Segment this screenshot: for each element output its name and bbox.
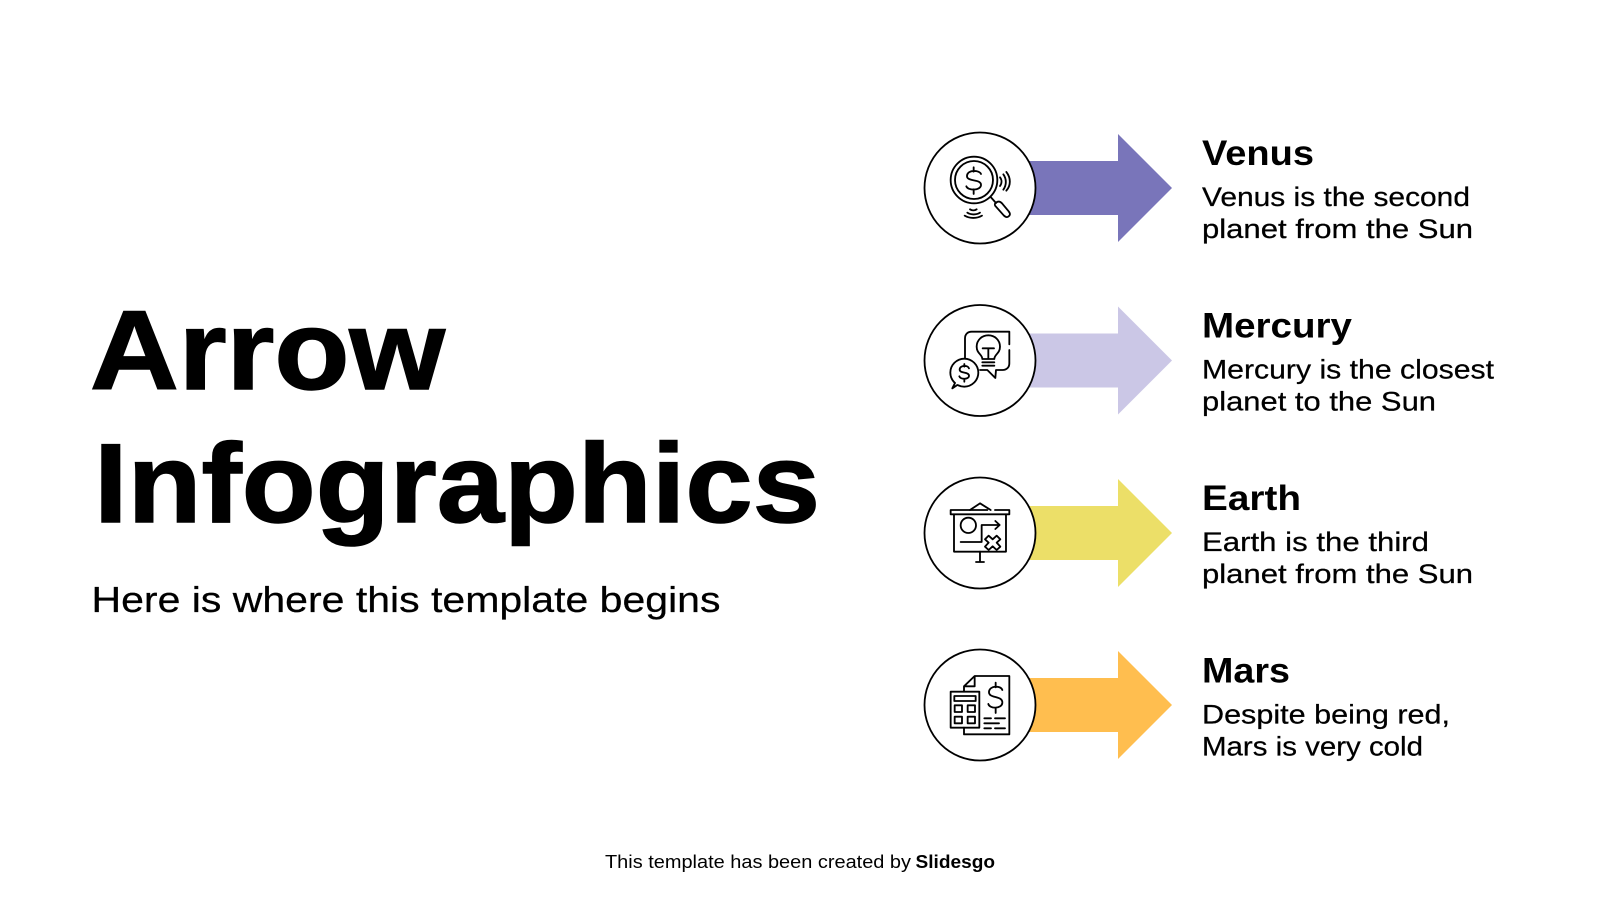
icon circle: Earth bbox=[924, 478, 1036, 588]
arrow: Mars bbox=[1025, 651, 1172, 759]
heading: Earth: Earth bbox=[1202, 479, 1301, 518]
description: Earth bbox=[1202, 527, 1473, 589]
heading: Mars: Mars bbox=[1202, 652, 1290, 690]
item: Mercury bbox=[924, 305, 1495, 416]
arrow: Venus bbox=[1025, 134, 1172, 242]
description: Mercury: planet to the Sun bbox=[1202, 386, 1436, 416]
description: Mars: Mars is very cold bbox=[1202, 732, 1423, 762]
footer credit: Slidesgo bbox=[916, 852, 995, 872]
description: Mars bbox=[1202, 700, 1450, 762]
icon: magnifier with dollar bbox=[951, 157, 1010, 218]
description: Earth: Earth is the third bbox=[1202, 527, 1429, 557]
item: Earth bbox=[924, 478, 1473, 589]
icon circle: Mercury bbox=[924, 305, 1036, 416]
description: Venus bbox=[1202, 182, 1473, 244]
footer credit: This template has been created by bbox=[605, 852, 911, 872]
icon: presentation board bbox=[951, 503, 1009, 562]
heading: Venus: Venus bbox=[1202, 134, 1314, 173]
heading: Mercury: Mercury bbox=[1202, 306, 1353, 346]
description: Mercury bbox=[1202, 354, 1495, 416]
title bbox=[90, 288, 820, 546]
icon circle: Mars bbox=[924, 650, 1036, 760]
title: Infographics bbox=[94, 421, 820, 546]
description: Venus: Venus is the second bbox=[1202, 182, 1470, 212]
title: Arrow bbox=[90, 288, 446, 413]
icon circle: Venus bbox=[924, 132, 1036, 244]
description: Mercury: Mercury is the closest bbox=[1202, 354, 1495, 384]
arrow: Earth bbox=[1025, 479, 1172, 587]
description: Venus: planet from the Sun bbox=[1202, 214, 1473, 244]
icon: idea and money speech bubbles bbox=[950, 332, 1009, 388]
subtitle: Here is where this template begins bbox=[92, 579, 720, 620]
item: Venus bbox=[924, 132, 1473, 244]
description: Earth: planet from the Sun bbox=[1202, 559, 1473, 589]
description: Mars: Despite being red, bbox=[1202, 700, 1450, 730]
icon: calculator and invoice bbox=[951, 676, 1009, 734]
arrow: Mercury bbox=[1025, 306, 1172, 414]
item: Mars bbox=[924, 650, 1450, 762]
